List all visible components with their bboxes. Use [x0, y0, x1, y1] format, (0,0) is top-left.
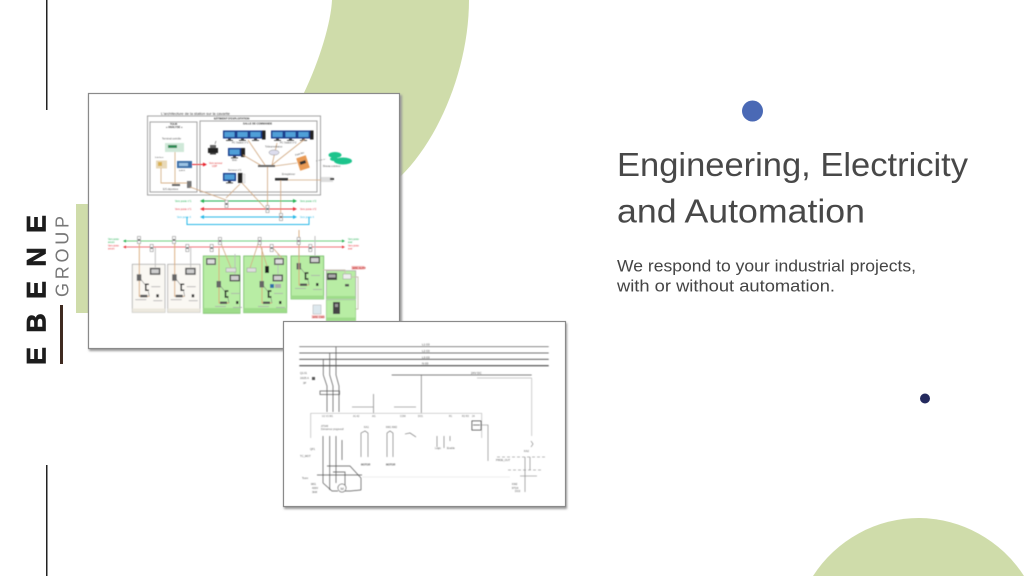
relay labels: Enable	[447, 447, 455, 450]
logo brown bar	[60, 305, 63, 364]
logo wordmark EBENE: EBENE	[22, 215, 52, 365]
field buses: amont	[108, 241, 115, 244]
decorative green circle bottom right	[813, 518, 1024, 576]
drive terminal labels: ATS48	[321, 425, 329, 428]
relay contacts	[361, 431, 450, 457]
building headings: TOUR	[170, 122, 177, 126]
control circuit labels: RT24	[512, 486, 519, 490]
schematic frame	[284, 322, 566, 506]
building headings: SALLE DE COMMANDE	[243, 122, 272, 126]
bus labels: L1 03	[422, 342, 430, 346]
drive terminal labels: R1	[449, 415, 453, 418]
drive terminal labels: 24	[472, 415, 475, 418]
field buses	[108, 238, 360, 250]
red arrow to device: Vers serveur	[209, 162, 223, 165]
card: cream 2	[168, 241, 200, 312]
bus labels: 24V DC	[471, 371, 482, 375]
control building frames	[148, 116, 320, 195]
monitor group right	[271, 130, 314, 144]
control wiring	[352, 375, 421, 413]
station bus arrows: Vers poste 4	[300, 216, 315, 219]
logo: EBENE GROUP	[22, 215, 72, 365]
heading line 2: and Automation	[617, 192, 865, 230]
monitor group left	[223, 130, 266, 144]
panel: electrical schematic	[284, 322, 567, 509]
breaker labels: Q1.01	[300, 371, 308, 375]
architecture diagram content	[108, 112, 366, 321]
substation cards	[132, 230, 366, 321]
breaker labels: 16/25 A	[300, 376, 309, 380]
schematic shadow	[284, 323, 567, 509]
left room devices	[155, 138, 192, 191]
left terminal labels: M01	[311, 482, 317, 486]
control circuit labels: DO2	[515, 489, 521, 493]
server workstation: Serveur n°1	[228, 169, 242, 172]
field buses: Vers poste	[108, 238, 120, 241]
building headings	[166, 116, 272, 129]
drive terminal labels: A1 A2	[353, 415, 360, 418]
bus labels: L3 03	[422, 355, 430, 359]
red tags: BRE ALPR	[352, 266, 366, 270]
logo wordmark GROUP: GROUP	[52, 216, 72, 297]
left room devices: Ipdmh	[179, 170, 186, 172]
bus labels: N 03	[422, 362, 429, 366]
body line 2: with or without automation.	[616, 278, 835, 296]
workstation	[228, 148, 245, 162]
bottom vertical rule	[46, 465, 48, 576]
body text	[616, 258, 916, 296]
firewall device	[295, 151, 310, 171]
field buses: aval	[348, 242, 353, 244]
relay labels	[361, 426, 455, 466]
remote device	[321, 177, 334, 182]
control circuit labels: KA2	[524, 449, 529, 453]
control circuit labels: KM2	[512, 482, 518, 486]
main power buses	[299, 347, 549, 366]
bus labels	[422, 342, 482, 375]
left room devices: Terminal contrôle	[162, 138, 182, 140]
left room devices: Interface	[155, 156, 164, 159]
decorative green arc shape top	[303, 0, 469, 177]
field buses: Vers poste	[108, 244, 120, 248]
network switches	[258, 146, 295, 180]
station bus arrows: Vers poste n°1	[175, 200, 192, 203]
control circuit labels	[496, 449, 529, 493]
monitor group left: PC Station n°1	[232, 142, 249, 144]
relay labels: Logic	[435, 447, 442, 450]
card: green 6	[323, 270, 358, 309]
workstation: Web	[232, 159, 238, 162]
external network cloud: Réseau extérieur	[323, 165, 341, 168]
bus connectors lower	[138, 236, 312, 252]
station bus arrows: Vers poste n°2	[300, 208, 317, 211]
red arrow to device: UDP	[212, 165, 217, 168]
card: cream 1	[132, 241, 165, 312]
drive terminal labels: DO1	[418, 415, 424, 418]
field buses: amont	[108, 248, 115, 250]
monitor group right: PC Station n°2	[280, 142, 297, 144]
control circuit right	[497, 441, 546, 492]
left terminal labels: TC_MOT	[300, 454, 311, 458]
schematic content	[299, 342, 549, 494]
card: green 3	[203, 241, 242, 313]
breaker labels: 3P	[303, 381, 306, 385]
left terminal labels: 3kW	[312, 490, 318, 494]
left terminal labels: Tcom	[302, 476, 308, 480]
blue accent dot	[742, 100, 763, 122]
field buses: Vers poste	[348, 244, 360, 248]
diagram title: L'architecture de la station sur la cavarite	[161, 112, 230, 116]
bus labels: L2 03	[422, 349, 430, 353]
panel: network architecture diagram	[88, 94, 402, 351]
network switches: Télésurveillance	[265, 146, 283, 148]
building headings: « ANALYSE »	[166, 125, 183, 129]
drive outline	[311, 378, 532, 438]
faint ground line	[362, 476, 510, 478]
relay labels: MOTOR	[386, 464, 395, 466]
body line 1: We respond to your industrial projects,	[617, 258, 916, 276]
motor symbol	[338, 484, 346, 492]
control circuit labels: PRDE_OUT	[496, 458, 511, 462]
drive terminal labels: COM	[400, 415, 406, 418]
red arrow to device	[192, 162, 223, 168]
relay labels: KA1	[364, 426, 369, 429]
field buses: Vers poste	[348, 238, 360, 241]
contactor block	[472, 421, 488, 461]
card: green 4	[244, 241, 287, 313]
printer	[208, 141, 218, 154]
drive terminal labels	[321, 415, 475, 431]
motor wiring	[317, 436, 362, 491]
station bus arrows: Vers poste 4	[177, 216, 192, 219]
server workstation	[223, 169, 245, 183]
external network cloud	[316, 152, 352, 168]
motor symbol: M	[340, 486, 344, 491]
drive terminal labels: Démarreur progressif	[321, 428, 344, 431]
bus connectors upper	[225, 200, 282, 220]
red tags	[312, 266, 366, 319]
breaker labels	[300, 371, 315, 385]
left room devices: E/S déportées	[163, 188, 179, 191]
heading	[617, 146, 969, 230]
left terminal labels: 400V	[312, 486, 318, 490]
navy accent dot	[920, 394, 930, 404]
network switches: Enregistreur	[282, 173, 295, 176]
field buses: aval	[348, 248, 353, 250]
heading line 1: Engineering, Electricity	[617, 146, 969, 183]
station bus arrows: Vers poste n°1	[175, 208, 192, 211]
network hub lines	[190, 139, 322, 217]
relay labels: MOTOR	[361, 464, 370, 466]
panel frame	[88, 94, 400, 348]
firewall device: Pare-feu	[295, 151, 305, 157]
panel shadow	[89, 95, 402, 351]
drive terminal labels: AI1	[372, 415, 376, 418]
card: green 5	[291, 230, 324, 299]
left terminal labels: QF1	[310, 447, 316, 451]
left terminal labels	[300, 447, 318, 494]
drive terminal labels: U1 V1 W1	[322, 415, 334, 418]
drive terminal labels: R2 R3	[462, 415, 469, 418]
card: green 7	[326, 300, 356, 321]
station bus arrows: Vers poste n°2	[300, 200, 317, 203]
building headings: BÂTIMENT D'EXPLOITATION	[214, 116, 250, 120]
red tags: BRE CMD	[312, 315, 325, 319]
top vertical rule	[46, 0, 48, 110]
relay labels: KM1 KM2	[386, 426, 398, 429]
green accent block behind panel	[76, 204, 90, 313]
control bus	[392, 374, 532, 376]
three-phase feeders	[320, 347, 340, 412]
station bus arrows	[175, 199, 317, 224]
